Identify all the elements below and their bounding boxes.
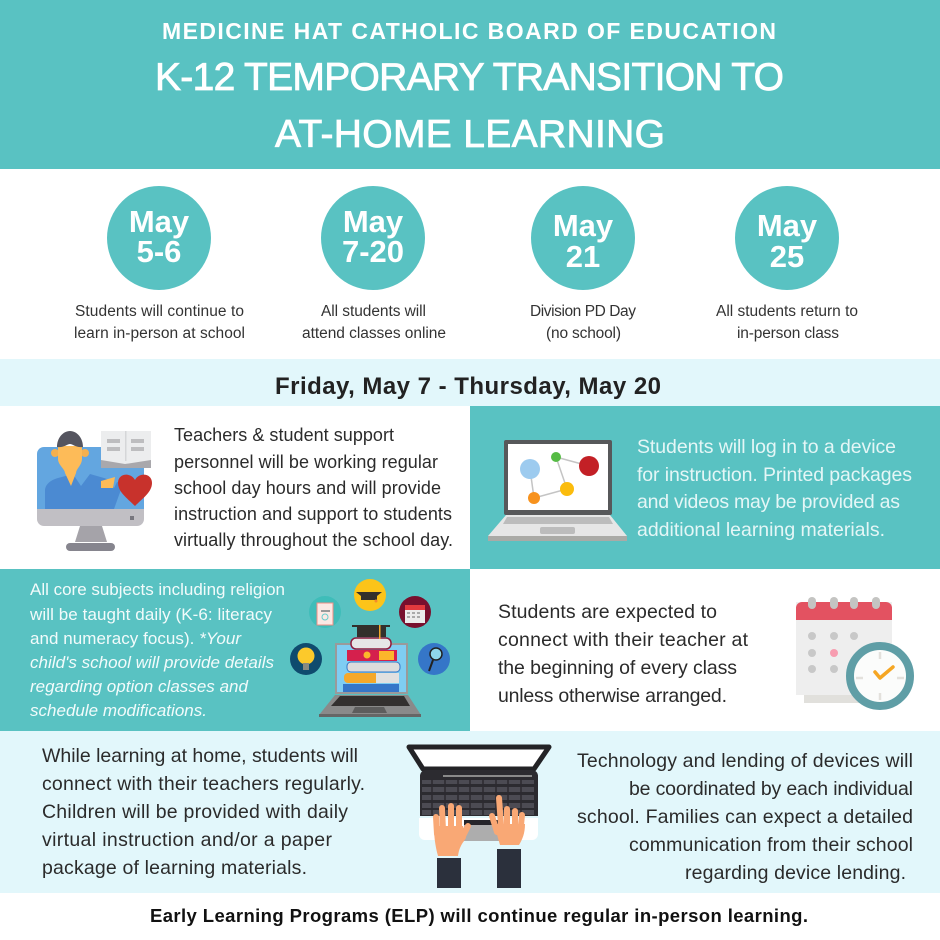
text: students log in: additional learning materials. [637,519,885,541]
timeline: May 21: May [553,208,614,243]
text: learning at home: Children will be provided with daily [42,801,348,823]
title: AT-HOME LEARNING [275,113,665,156]
text: core subjects: and numeracy focus). *Your [30,629,242,648]
organisation name: MEDICINE HAT CATHOLIC BOARD OF EDUCATION [162,18,776,44]
icon: calendar and clock [796,597,910,706]
panel: learning at home and devices [0,731,940,893]
timeline: May 25: 25 [770,239,804,274]
timeline: May 7-20 [302,186,446,342]
date range band: Friday, May 7 - Thursday, May 20 [275,373,661,400]
panel: teachers [37,425,453,551]
timeline: May 7-20: May [343,204,404,239]
text: learning at home [42,745,365,879]
text: connect with teacher: connect with their teacher at [498,629,749,651]
text: learning at home: virtual instruction and/or a paper [42,829,332,851]
panel: connect with teacher [498,597,910,707]
title [155,56,784,156]
text: learning at home: While learning at home, students will [42,745,358,767]
text: students log in: Students will log in to a device [637,436,896,458]
text: connect with teacher [498,601,749,707]
title: K-12 TEMPORARY TRANSITION TO [155,56,784,99]
timeline: May 25: May [757,208,818,243]
timeline: May 21 [530,186,636,342]
text: learning at home: connect with their teachers regularly. [42,773,365,795]
timeline: May 25: All students return to [716,303,858,320]
text: core subjects [29,580,285,720]
timeline: May 25 [716,186,858,342]
text: core subjects: schedule modifications. [30,701,207,720]
timeline: May 5-6: learn in-person at school [74,325,245,342]
text: technology and device lending: regarding device lending. [685,862,906,884]
timeline: May 21: (no school) [546,325,621,342]
text: connect with teacher: unless otherwise arranged. [498,685,727,707]
text: students log in [637,436,912,541]
text: technology and device lending: communication from their school [629,834,913,856]
panel: students log in [470,406,940,569]
timeline: May 5-6: May [129,204,190,239]
text: technology and device lending: Technology and lending of devices will [577,750,913,772]
text: learning at home: package of learning materials. [42,857,307,879]
text: teachers: Teachers & student support [174,425,394,445]
text: core subjects: All core subjects including religion [30,580,285,599]
text: core subjects: regarding option classes and [30,677,249,696]
text: teachers: instruction and support to students [174,504,452,524]
text: technology and device lending [577,750,913,884]
text: teachers: virtually throughout the school day. [174,530,453,550]
text: core subjects: child's school will provide details [30,653,274,672]
panel: core subjects [0,569,470,731]
text: connect with teacher: the beginning of every class [498,657,737,679]
text: teachers: school day hours and will provide [174,478,441,498]
text: teachers: personnel will be working regular [174,452,438,472]
timeline: May 21: Division PD Day [530,303,636,320]
header banner [0,0,940,169]
text: students log in: and videos may be provided as [637,491,900,513]
icon: teacher on monitor with book and heart [37,431,152,551]
text: technology and device lending: school. Families can expect a detailed [577,806,913,828]
timeline: May 7-20: 7-20 [342,234,404,269]
timeline: May 7-20: All students will [321,303,426,320]
timeline: May 5-6: Students will continue to [75,303,244,320]
text: technology and device lending: be coordinated by each individual [629,778,913,800]
text: core subjects: will be taught daily (K-6: literacy [29,605,272,624]
footer note: Early Learning Programs (ELP) will continue regular in-person learning. [150,905,808,926]
text: students log in: for instruction. Printed packages [637,464,912,486]
text: teachers [174,425,453,550]
timeline: May 21: 21 [566,239,600,274]
timeline: May 25: in-person class [737,325,839,342]
date range band [0,359,940,406]
timeline: May 5-6: 5-6 [137,234,181,269]
icon: books on laptop with subject bubbles [290,579,450,717]
icon: hands typing on laptop [409,747,549,888]
text: connect with teacher: Students are expected to [498,601,717,623]
icon: laptop with network diagram [488,440,627,541]
timeline: May 5-6 [74,186,245,342]
timeline: May 7-20: attend classes online [302,325,446,342]
